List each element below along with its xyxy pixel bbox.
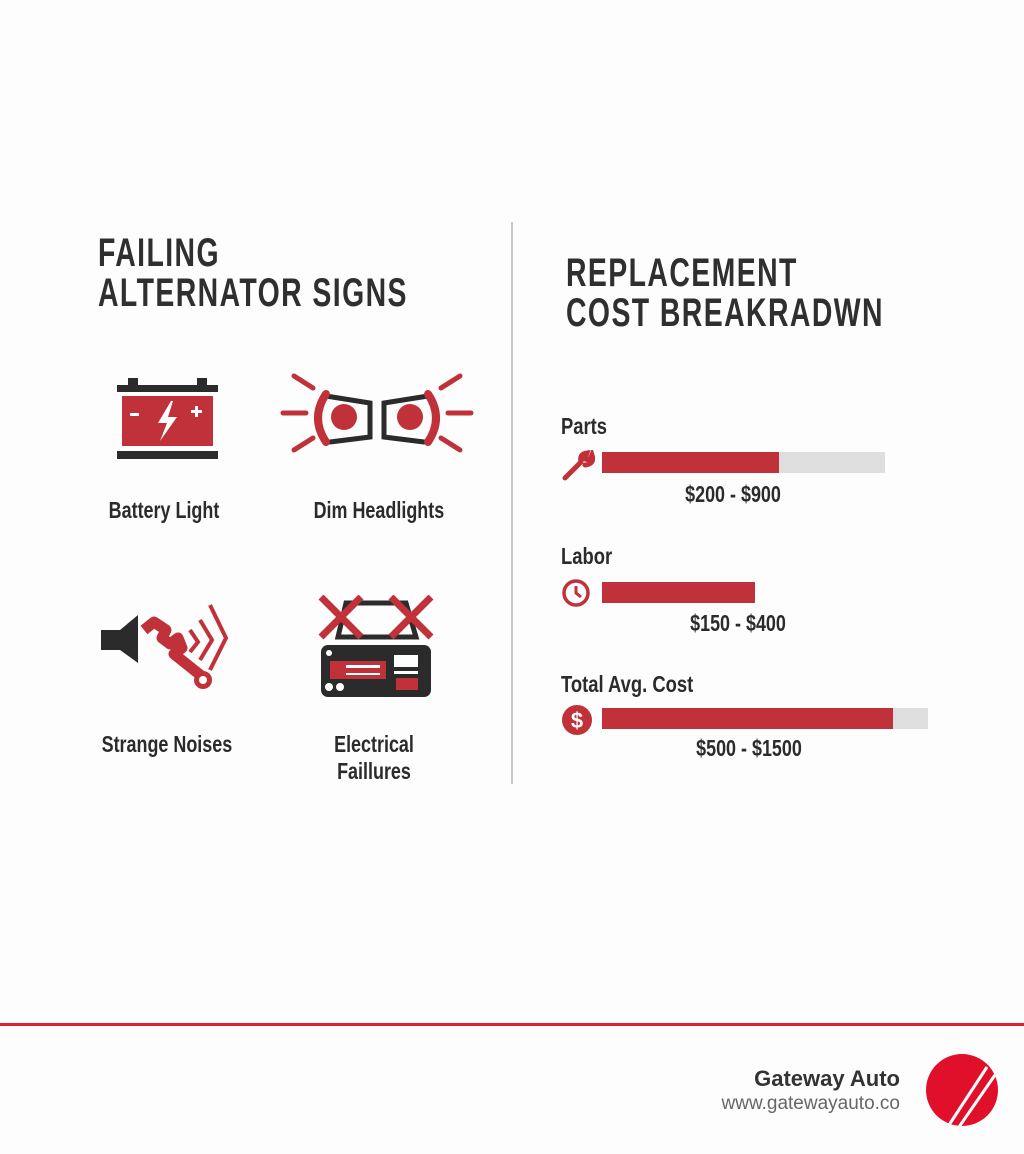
bar: total xyxy=(602,708,928,729)
icon: electrical failure xyxy=(318,595,434,697)
title: replacement cost breakdown: REPLACEMENT xyxy=(566,251,798,295)
icon: headlights xyxy=(280,374,474,452)
title: failing alternator signs: ALTERNATOR SIGNS xyxy=(98,271,408,315)
total label: Total Avg. Cost xyxy=(561,671,693,697)
value: parts: $200 - $900 xyxy=(685,481,781,507)
brand text: Gateway Auto xyxy=(754,1066,900,1091)
logo xyxy=(926,1054,998,1126)
icon: dollar: $ xyxy=(571,708,583,733)
title: replacement cost breakdown xyxy=(566,251,884,335)
icon: wrench xyxy=(562,450,596,480)
icon: clock xyxy=(562,579,590,607)
label: electrical failures: Electrical xyxy=(334,731,414,757)
icon: noise wrench xyxy=(101,604,228,689)
brand text: www.gatewayauto.co xyxy=(722,1093,900,1114)
bar: parts xyxy=(602,452,885,473)
icon: battery xyxy=(117,378,218,459)
title: failing alternator signs: FAILING xyxy=(98,231,220,275)
label: strange noises: Strange Noises xyxy=(102,731,232,757)
title: failing alternator signs xyxy=(98,231,408,315)
value: total: $500 - $1500 xyxy=(696,735,802,761)
divider xyxy=(511,222,513,784)
label: electrical failures xyxy=(334,731,414,784)
icon: dollar xyxy=(562,705,592,735)
label: electrical failures: Faillures xyxy=(337,758,411,784)
label: battery light: Battery Light xyxy=(109,497,219,523)
parts label: Parts xyxy=(561,413,607,439)
bar: labor xyxy=(602,582,755,603)
label: dim headlights: Dim Headlights xyxy=(314,497,444,523)
footer line xyxy=(0,1023,1024,1026)
title: replacement cost breakdown: COST BREAKRADWN xyxy=(566,291,884,335)
brand text xyxy=(722,1066,900,1114)
value: labor: $150 - $400 xyxy=(690,610,786,636)
labor label: Labor xyxy=(561,543,612,569)
